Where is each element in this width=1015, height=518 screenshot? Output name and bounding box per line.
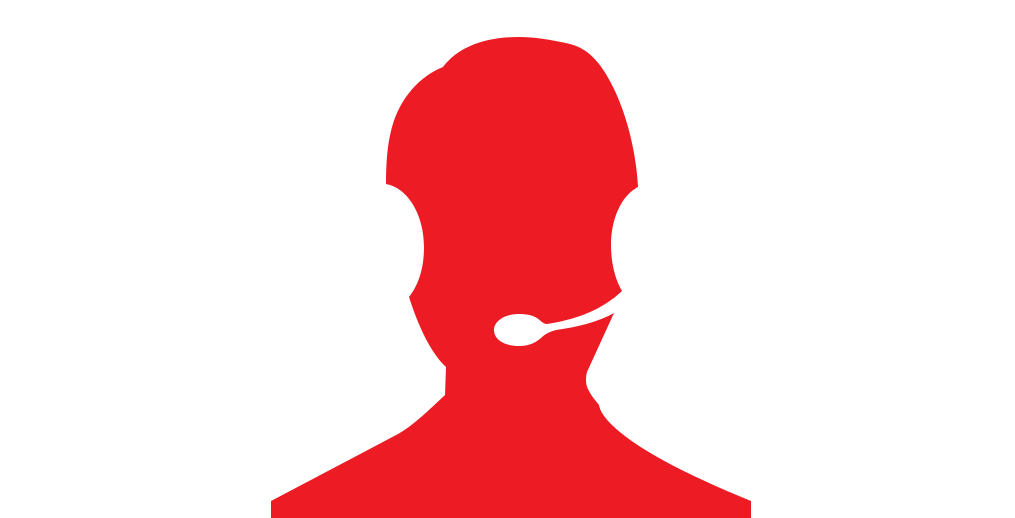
silhouette: head and shoulders: [271, 37, 751, 518]
